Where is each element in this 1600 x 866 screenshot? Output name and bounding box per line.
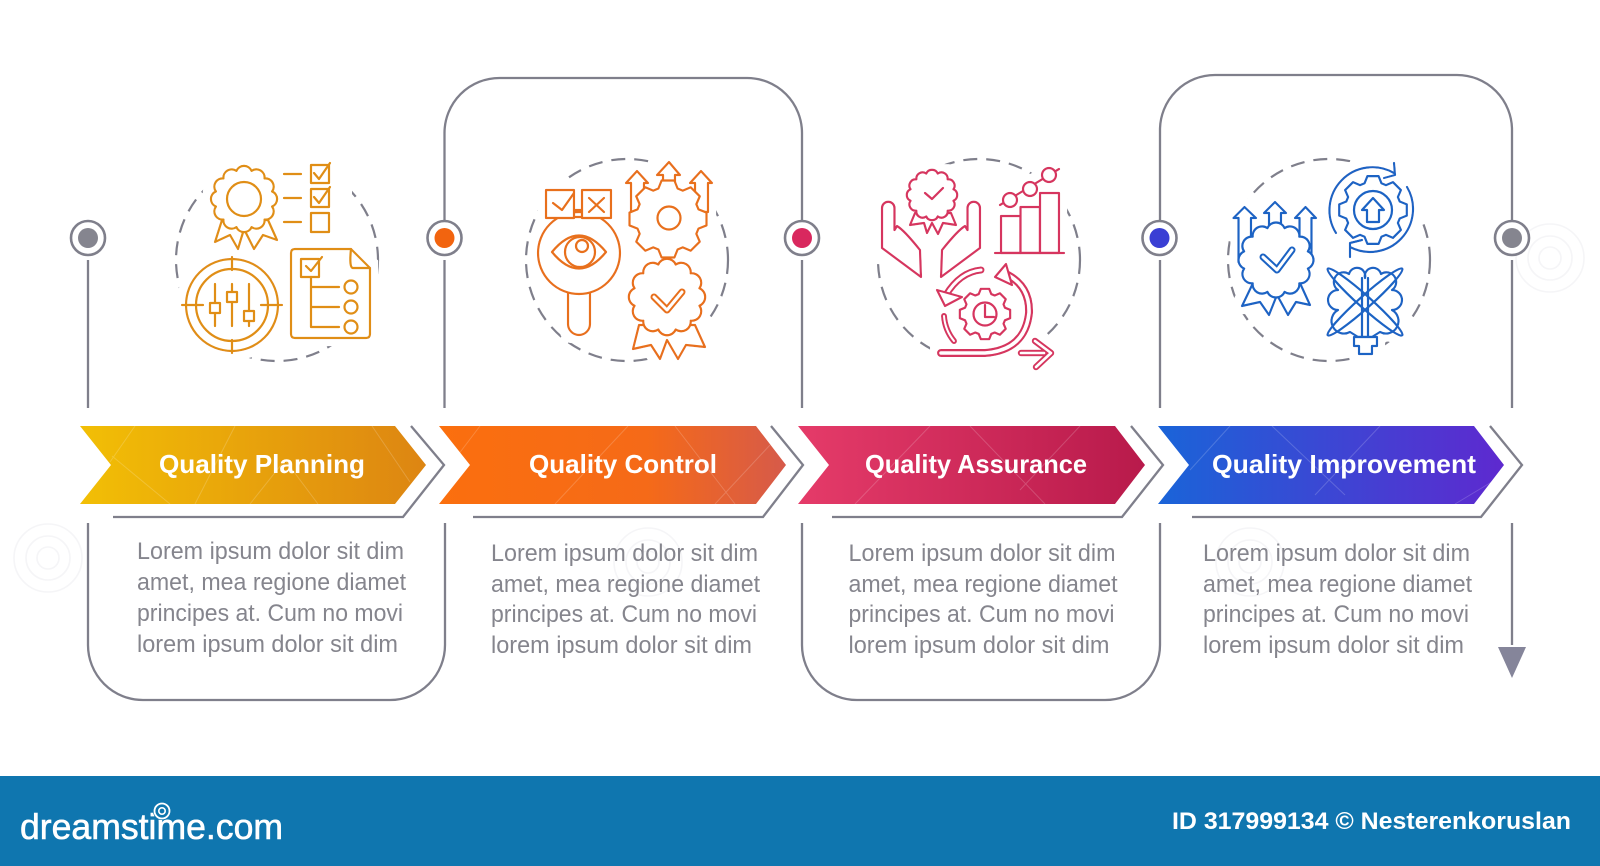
text block: quality control description: principes at. Cum no movi bbox=[491, 601, 757, 628]
icon: document checklist bbox=[291, 249, 370, 338]
text block: quality planning description bbox=[137, 538, 406, 658]
icon: target with sliders bbox=[182, 257, 282, 353]
text block: quality assurance description: lorem ipsum dolor sit dim bbox=[848, 632, 1110, 659]
icon: checklist bbox=[284, 163, 330, 232]
icon: award badge bbox=[211, 166, 277, 249]
footer credit: ID 317999134 © Nesterenkoruslan bbox=[1172, 808, 1571, 835]
watermark spirals bbox=[14, 224, 1584, 596]
node 3 bbox=[785, 221, 819, 255]
timeline connector: step 4 upper arch bbox=[1160, 75, 1512, 408]
node 4 bbox=[1142, 221, 1176, 255]
chevron outline 4 bbox=[1192, 426, 1522, 517]
text block: quality planning description: principes at. Cum no movi bbox=[137, 600, 403, 627]
banner: quality assurance bbox=[798, 426, 1145, 504]
panel: quality planning icon bbox=[176, 152, 378, 361]
heading: Quality Improvement bbox=[1212, 449, 1476, 479]
text block: quality improvement description: lorem ipsum dolor sit dim bbox=[1203, 632, 1464, 659]
icon: badge with arrows bbox=[1234, 202, 1316, 315]
text block: quality improvement description: Lorem ipsum dolor sit dim bbox=[1203, 540, 1470, 567]
icon: brain bulb bbox=[1324, 264, 1406, 354]
text block: quality improvement description: principes at. Cum no movi bbox=[1203, 601, 1469, 628]
heading: Quality Planning bbox=[159, 449, 365, 479]
heading: Quality Control bbox=[529, 449, 717, 479]
panel: quality control icon bbox=[526, 159, 728, 361]
chevron outline 3 bbox=[832, 426, 1163, 517]
text block: quality assurance description: principes at. Cum no movi bbox=[848, 601, 1114, 628]
text block: quality assurance description bbox=[848, 540, 1118, 659]
banner: quality improvement bbox=[1158, 426, 1504, 504]
arrow: timeline end bbox=[1498, 523, 1526, 678]
text block: quality control description: Lorem ipsum dolor sit dim bbox=[491, 540, 758, 567]
text block: quality planning description: Lorem ipsum dolor sit dim bbox=[137, 538, 404, 565]
chevron outline 2 bbox=[473, 426, 803, 517]
text block: quality planning description: lorem ipsum dolor sit dim bbox=[137, 631, 398, 658]
chevron outline 1 bbox=[113, 426, 444, 517]
text block: quality planning description: amet, mea regione diamet bbox=[137, 569, 406, 596]
panel: quality improvement icon bbox=[1228, 159, 1430, 361]
text block: quality improvement description: amet, mea regione diamet bbox=[1203, 571, 1472, 598]
footer bar bbox=[0, 776, 1600, 866]
icon: bar chart with trend bbox=[995, 168, 1064, 253]
timeline connector: step 2 upper arch bbox=[444, 78, 802, 408]
node 5 bbox=[1495, 221, 1529, 255]
node 1 bbox=[71, 221, 105, 255]
heading: Quality Assurance bbox=[865, 449, 1087, 479]
node 2 bbox=[428, 221, 462, 255]
icon: gear with arrows bbox=[626, 162, 712, 258]
timeline connector: step 1 line and lower arch bbox=[88, 260, 445, 700]
icon: cycle with clock gear bbox=[937, 264, 1051, 367]
banner: quality control bbox=[439, 426, 786, 504]
text block: quality control description: amet, mea regione diamet bbox=[491, 571, 760, 598]
text block: quality control description bbox=[491, 540, 760, 659]
icon: magnifier with eye bbox=[538, 190, 620, 335]
text block: quality improvement description bbox=[1203, 540, 1472, 659]
text block: quality control description: lorem ipsum dolor sit dim bbox=[491, 632, 752, 659]
icon: circular gear with up arrow bbox=[1329, 163, 1413, 257]
icon: hands holding badge bbox=[882, 170, 980, 277]
panel: quality assurance icon bbox=[878, 159, 1080, 367]
footer logo: dreamstime.com bbox=[20, 806, 283, 847]
timeline connector: step 3 lower arch bbox=[802, 523, 1160, 700]
banner: quality planning bbox=[80, 426, 426, 504]
icon: check badge bbox=[629, 259, 705, 359]
text block: quality assurance description: Lorem ipsum dolor sit dim bbox=[848, 540, 1116, 567]
text block: quality assurance description: amet, mea regione diamet bbox=[848, 571, 1118, 598]
